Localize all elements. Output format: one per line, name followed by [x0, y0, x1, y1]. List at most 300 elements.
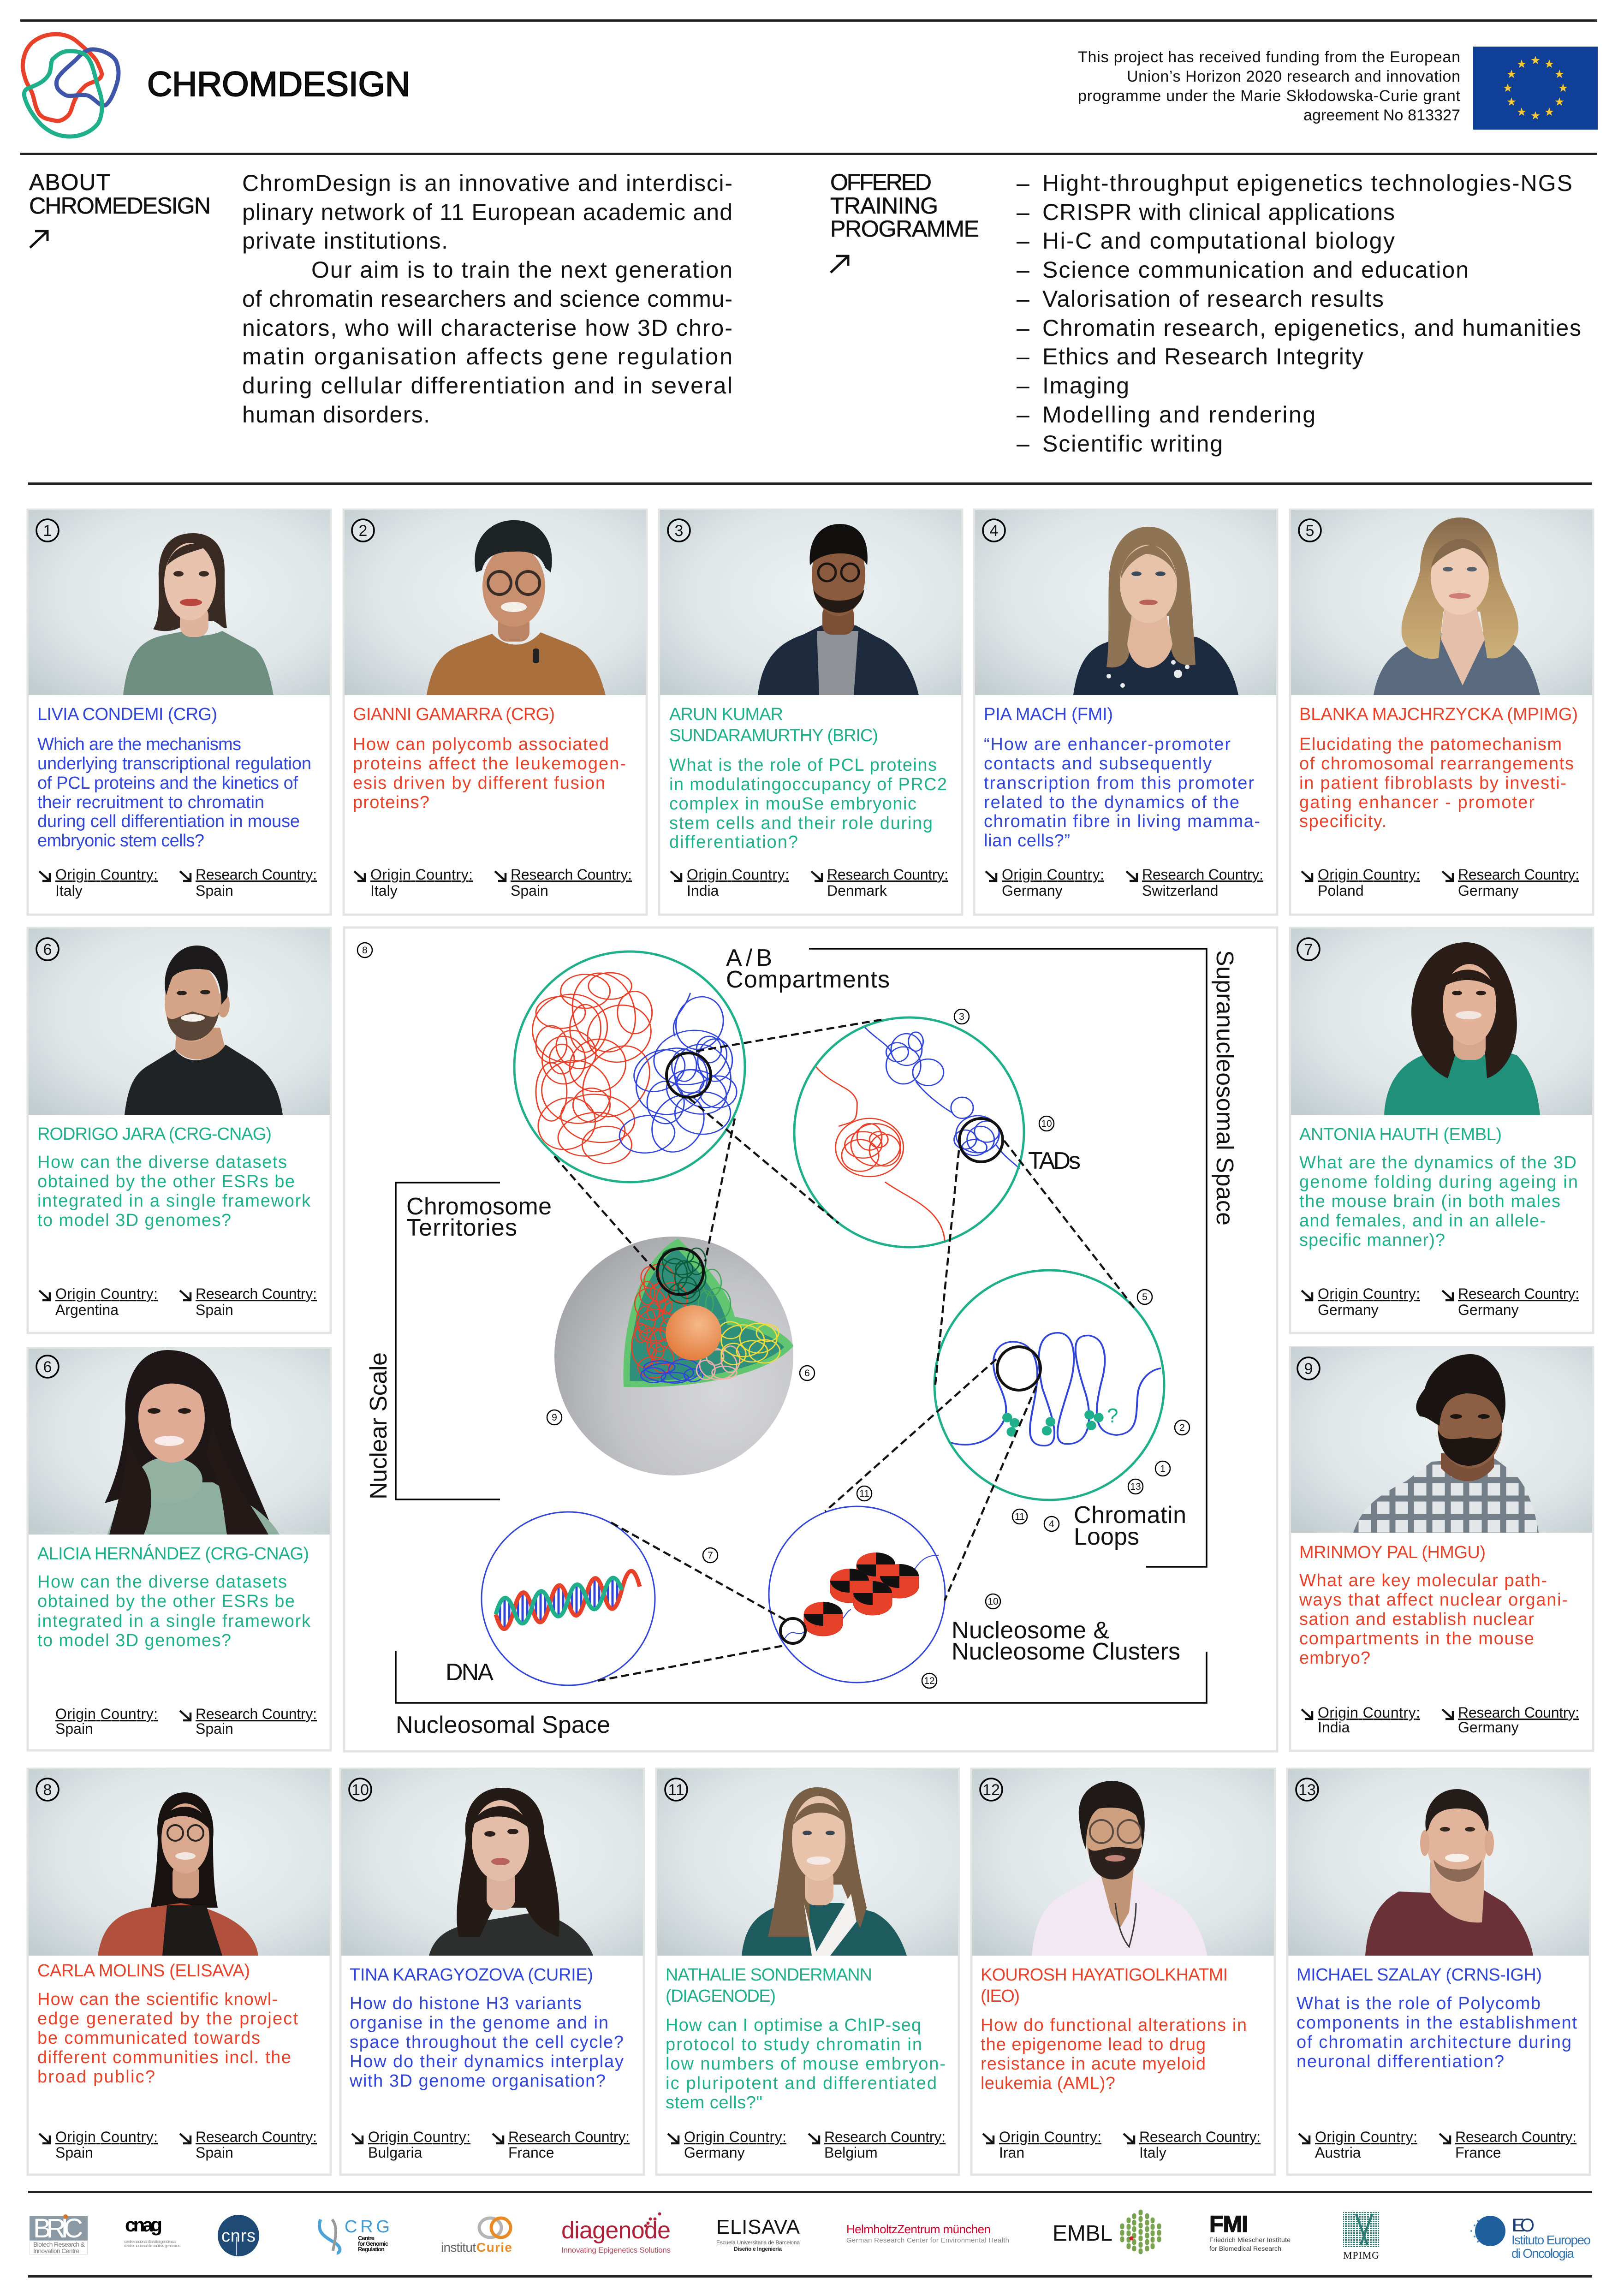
name and question: be communicated towards — [37, 2028, 260, 2048]
name and question: space throughout the cell cycle? — [350, 2033, 624, 2052]
diagram labels: Chromatin — [1074, 1502, 1186, 1529]
name and question: components in the establishment — [1297, 2013, 1577, 2033]
countries: Research Country: — [1142, 866, 1263, 883]
name and question — [37, 1961, 298, 2087]
training list: – — [1017, 257, 1029, 283]
name and question: contacts and subsequently — [984, 754, 1212, 773]
logo: BRIC: Biotech Research & — [33, 2241, 85, 2248]
name and question: “How are enhancer-promoter — [984, 735, 1231, 754]
logo: FMI — [1209, 2211, 1291, 2252]
name and question: obtained by the other ESRs be — [37, 1592, 295, 1611]
logo: CRG: CRG — [345, 2217, 390, 2237]
photo: Antonia — [1291, 928, 1592, 1115]
logo: CRG: Regulation — [358, 2246, 385, 2253]
name and question: How do functional alterations in — [981, 2016, 1247, 2035]
name and question: ways that affect nuclear organi- — [1299, 1590, 1568, 1610]
countries: Austria — [1315, 2144, 1361, 2161]
countries: Origin Country: — [684, 2129, 786, 2145]
researcher number markers: 10 — [1041, 1118, 1052, 1129]
name and question: MRINMOY PAL (HMGU) — [1299, 1543, 1486, 1562]
countries — [671, 866, 948, 899]
name and question — [669, 705, 947, 852]
name and question: MICHAEL SZALAY (CRNS-IGH) — [1297, 1965, 1542, 1985]
heading: offered training programme: TRAINING — [830, 193, 938, 219]
name and question: RODRIGO JARA (CRG-CNAG) — [37, 1124, 272, 1144]
name and question: Elucidating the patomechanism — [1299, 735, 1562, 754]
name and question — [1299, 1125, 1578, 1250]
name and question: in patient fibroblasts by investi- — [1299, 773, 1566, 793]
countries: Spain — [511, 882, 548, 899]
name and question: GIANNI GAMARRA (CRG) — [353, 705, 555, 724]
name and question: complex in mouSe embryonic — [669, 794, 916, 814]
logo: IEO: IEO — [1511, 2215, 1535, 2236]
name and question: How can polycomb associated — [353, 735, 609, 754]
countries — [39, 2129, 317, 2161]
number badge — [36, 1779, 59, 1801]
name and question: SUNDARAMURTHY (BRIC) — [669, 726, 878, 745]
countries: Origin Country: — [368, 2129, 470, 2145]
countries: Research Country: — [196, 1706, 317, 1722]
countries: Research Country: — [196, 2129, 317, 2145]
countries: Origin Country: — [999, 2129, 1101, 2145]
name and question: neuronal differentiation? — [1297, 2052, 1504, 2071]
countries: Research Country: — [196, 1285, 317, 1302]
training list: – — [1017, 315, 1029, 341]
card 2: Gianni Gamarra — [344, 510, 647, 915]
name and question: ARUN KUMAR — [669, 705, 783, 724]
countries — [983, 2129, 1261, 2161]
about text: plinary network of 11 European academic and — [242, 199, 732, 225]
countries: Research Country: — [827, 866, 948, 883]
number badge — [1296, 1779, 1318, 1801]
about text: of chromatin researchers and science commu- — [242, 286, 732, 312]
about text: ChromDesign is an innovative and interdisci- — [242, 170, 732, 196]
heading: about: ABOUT — [29, 169, 110, 195]
countries: Research Country: — [1458, 1285, 1579, 1302]
countries: Spain — [196, 2144, 233, 2161]
researcher number markers: 9 — [552, 1412, 557, 1423]
name and question: CARLA MOLINS (ELISAVA) — [37, 1961, 250, 1981]
countries: France — [1455, 2144, 1501, 2161]
diagram labels: Loops — [1074, 1523, 1139, 1550]
card 10: Tina Karagyozova — [340, 1769, 644, 2175]
researcher number markers: 13 — [1130, 1481, 1141, 1492]
logo: CNRS: cnrs — [221, 2226, 256, 2246]
name and question: (IEO) — [981, 1987, 1020, 2006]
heading: offered training programme: OFFERED — [830, 169, 932, 195]
countries — [668, 2129, 946, 2161]
countries: Germany — [1458, 1719, 1519, 1736]
countries — [39, 1285, 317, 1318]
logo: Helmholtz: HelmholtzZentrum münchen — [846, 2222, 991, 2236]
logo: Helmholtz — [846, 2222, 1009, 2244]
zoom rings — [657, 1053, 1041, 1643]
logo: BRIC: BRIC — [33, 2213, 83, 2243]
name and question: What is the role of Polycomb — [1297, 1994, 1541, 2013]
logo: IEO: di Oncologia — [1511, 2246, 1574, 2260]
name and question: compartments in the mouse — [1299, 1629, 1534, 1648]
countries: Origin Country: — [1318, 866, 1420, 883]
training list: CRISPR with clinical applications — [1042, 199, 1395, 225]
training list: – — [1017, 431, 1029, 457]
name and question — [981, 1965, 1247, 2093]
training list: – — [1017, 199, 1029, 225]
name and question: stem cells?" — [666, 2093, 762, 2112]
countries — [1302, 866, 1579, 899]
photo: Alicia — [29, 1349, 330, 1535]
researcher number markers: 4 — [1049, 1519, 1054, 1529]
photo: Blanka — [1291, 510, 1592, 695]
countries — [1302, 1285, 1579, 1318]
number badge: 6 — [43, 941, 52, 958]
name and question: to model 3D genomes? — [37, 1631, 231, 1650]
countries — [1299, 2129, 1576, 2161]
name and question: embryo? — [1299, 1648, 1370, 1668]
name and question: BLANKA MAJCHRZYCKA (MPIMG) — [1299, 705, 1578, 724]
name and question: underlying transcriptional regulation — [37, 754, 311, 773]
training list: Ethics and Research Integrity — [1042, 344, 1363, 369]
logo: BRIC: Innovation Centre — [33, 2247, 79, 2254]
countries: Spain — [196, 1720, 233, 1737]
researcher number markers: 10 — [987, 1596, 999, 1607]
photo: Rodrigo — [29, 928, 330, 1115]
logo: Institut Curie — [441, 2218, 512, 2254]
name and question: KOUROSH HAYATIGOLKHATMI — [981, 1965, 1228, 1985]
countries: India — [1318, 1719, 1350, 1736]
photo: Livia — [29, 510, 330, 695]
circle: chromatin loops: ? — [1107, 1404, 1118, 1427]
card 11: Nathalie Sondermann — [656, 1769, 959, 2175]
logo: Elisava — [716, 2216, 800, 2252]
name and question: TINA KARAGYOZOVA (CURIE) — [350, 1965, 593, 1985]
name and question: How do their dynamics interplay — [350, 2052, 624, 2071]
name and question: organise in the genome and in — [350, 2013, 608, 2033]
number badge — [668, 519, 690, 541]
researcher number markers: 11 — [1015, 1511, 1025, 1522]
photo: Pia — [975, 510, 1276, 695]
circle: chromatin loops — [934, 1270, 1164, 1500]
name and question: during cell differentiation in mouse — [37, 812, 300, 831]
name and question: How can the diverse datasets — [37, 1153, 287, 1172]
logo: CRG: for Genomic — [358, 2240, 388, 2247]
logo: FMI: FMI — [1209, 2211, 1248, 2237]
name and question: of PCL proteins and the kinetics of — [37, 773, 298, 793]
countries: France — [508, 2144, 554, 2161]
name and question — [37, 705, 311, 851]
diagram labels — [365, 945, 1238, 1738]
logo: cnag — [124, 2214, 180, 2248]
countries: Italy — [370, 882, 398, 899]
countries: Spain — [55, 2144, 93, 2161]
number badge: 4 — [990, 522, 998, 540]
logo: EMBL: EMBL — [1053, 2221, 1112, 2246]
name and question: specific manner)? — [1299, 1231, 1445, 1250]
countries: Iran — [999, 2144, 1024, 2161]
name and question: (DIAGENODE) — [666, 1987, 776, 2006]
training list: Scientific writing — [1042, 431, 1223, 457]
heading: about — [29, 169, 211, 219]
number badge: 8 — [43, 1781, 52, 1799]
name and question — [37, 1124, 311, 1230]
name and question: esis driven by different fusion — [353, 773, 605, 793]
logo: Diagenode — [561, 2212, 671, 2254]
training list — [1017, 170, 1581, 457]
name and question — [353, 705, 626, 812]
countries: Research Country: — [1458, 1704, 1579, 1721]
countries: Poland — [1318, 882, 1364, 899]
logo: CRG — [319, 2217, 390, 2253]
card 6b: Alicia Hernandez — [28, 1348, 331, 1750]
icon: arrow about — [30, 231, 48, 248]
countries: Origin Country: — [1318, 1704, 1420, 1721]
diagram labels: Nucleosome & — [952, 1617, 1109, 1644]
card 8: Carla Molins — [28, 1769, 331, 2175]
logo: Elisava: Escuela Universitaria de Barcelona — [716, 2239, 800, 2246]
number badge: 11 — [668, 1781, 684, 1799]
funding statement: Union’s Horizon 2020 research and innovation — [1127, 68, 1460, 85]
countries: Research Country: — [508, 2129, 630, 2145]
logo: MPIMG: MPIMG — [1343, 2249, 1379, 2261]
countries: Spain — [55, 1720, 93, 1737]
name and question: low numbers of mouse embryon- — [666, 2054, 946, 2074]
diagram labels: DNA — [446, 1659, 494, 1686]
training list: Hight-throughput epigenetics technologies-NGS — [1042, 170, 1572, 196]
photo: Michael — [1288, 1769, 1589, 1956]
training list: Science communication and education — [1042, 257, 1469, 283]
countries: Origin Country: — [370, 866, 473, 883]
countries: Germany — [1318, 1302, 1379, 1318]
number badge — [980, 1779, 1002, 1801]
name and question: leukemia (AML)? — [981, 2074, 1115, 2093]
name and question: broad public? — [37, 2067, 155, 2087]
countries — [39, 866, 317, 899]
number badge — [1297, 1357, 1320, 1380]
name and question: How do histone H3 variants — [350, 1994, 582, 2013]
card 13: Michael Szalay — [1287, 1769, 1590, 2175]
countries: Italy — [55, 882, 83, 899]
number badge: 6 — [43, 1358, 52, 1376]
researcher number markers: 12 — [924, 1676, 935, 1686]
number badge: 9 — [1304, 1360, 1313, 1378]
countries: Origin Country: — [55, 2129, 158, 2145]
logo: IEO: Istituto Europeo — [1511, 2233, 1591, 2247]
name and question: gating enhancer - promoter — [1299, 793, 1535, 812]
number badge: 10 — [351, 1781, 369, 1799]
training list: Modelling and rendering — [1042, 402, 1315, 428]
logo: EMBL — [1053, 2212, 1159, 2256]
name and question: LIVIA CONDEMI (CRG) — [37, 705, 217, 724]
training list: – — [1017, 402, 1029, 428]
about text: Our aim is to train the next generation — [311, 257, 732, 283]
name and question: NATHALIE SONDERMANN — [666, 1965, 872, 1985]
number badge: 2 — [359, 522, 367, 540]
logo: CNRS — [218, 2215, 259, 2256]
number badge: 12 — [982, 1781, 1000, 1799]
name and question: different communities incl. the — [37, 2048, 291, 2067]
logo: cnag: centro nacional de análisis genómico — [124, 2243, 180, 2248]
logo: FMI: Friedrich Miescher Institute — [1209, 2236, 1291, 2243]
photo: Carla — [29, 1769, 330, 1956]
logo: Elisava: ELISAVA — [716, 2216, 800, 2238]
countries: Research Country: — [1455, 2129, 1576, 2145]
training list: Valorisation of research results — [1042, 286, 1384, 312]
diagram labels: Nucleosome Clusters — [952, 1638, 1180, 1665]
name and question: What are the dynamics of the 3D — [1299, 1153, 1576, 1172]
diagram labels: Nucleosomal Space — [396, 1712, 610, 1738]
researcher number markers — [357, 943, 1190, 1688]
logo: ChromDesign interlaced rings — [23, 34, 119, 137]
circle: nucleosomes — [769, 1506, 945, 1683]
diagram labels: Compartments — [726, 966, 890, 993]
researcher number markers: 5 — [1142, 1292, 1148, 1303]
training list: – — [1017, 373, 1029, 399]
number badge: 13 — [1298, 1781, 1316, 1799]
countries: Germany — [684, 2144, 745, 2161]
name and question — [1299, 1543, 1568, 1668]
countries: Argentina — [55, 1302, 119, 1318]
countries: Germany — [1002, 882, 1063, 899]
countries: Belgium — [824, 2144, 878, 2161]
name and question: Which are the mechanisms — [37, 735, 241, 754]
training list: – — [1017, 170, 1029, 196]
number badge — [36, 938, 59, 960]
logo: BRIC — [30, 2213, 88, 2254]
logo: CRG: Centre — [358, 2235, 375, 2242]
name and question: embryonic stem cells? — [37, 831, 204, 851]
countries: Research Country: — [1139, 2129, 1261, 2145]
name and question — [1297, 1965, 1577, 2071]
logo: Diagenode: diagenode — [561, 2217, 671, 2244]
name and question: proteins affect the leukemogen- — [353, 754, 626, 773]
researcher number markers: 8 — [362, 945, 368, 956]
name and question: obtained by the other ESRs be — [37, 1172, 295, 1191]
countries: Research Country: — [511, 866, 632, 883]
photo: Tina — [341, 1769, 643, 1956]
number badge — [349, 1779, 371, 1801]
countries — [55, 1706, 317, 1737]
logo: Institut Curie: institut — [441, 2240, 476, 2254]
researcher number markers: 2 — [1179, 1422, 1185, 1433]
panel: 3D genome scales diagram — [344, 928, 1277, 1751]
heading: offered training programme — [830, 169, 979, 242]
countries: Origin Country: — [55, 1706, 158, 1722]
about text: matin organisation affects gene regulation — [242, 344, 732, 369]
countries: Origin Country: — [687, 866, 789, 883]
icon: arrow training — [831, 256, 848, 273]
name and question: of chromosomal rearrangements — [1299, 754, 1574, 773]
name and question: in modulatingoccupancy of PRC2 — [669, 775, 947, 794]
logo: IEO — [1470, 2215, 1591, 2260]
countries: Research Country: — [1458, 866, 1579, 883]
researcher number markers: 6 — [804, 1368, 810, 1379]
photo: Nathalie — [657, 1769, 958, 1956]
logo: Institut Curie: Curie — [476, 2240, 512, 2254]
name and question: How can the scientific knowl- — [37, 1990, 278, 2009]
training list: – — [1017, 286, 1029, 312]
icon: EU flag — [1473, 47, 1598, 130]
card 4: Pia Mach — [974, 510, 1277, 915]
about text: private institutions. — [242, 228, 448, 254]
card 1: Livia Condemi — [28, 510, 331, 915]
number badge — [1299, 519, 1321, 541]
number badge — [983, 519, 1005, 541]
about text: nicators, who will characterise how 3D chro- — [242, 315, 732, 341]
about text: during cellular differentiation and in several — [242, 373, 732, 399]
photo: Mrinmoy — [1291, 1347, 1592, 1533]
name and question: and females, and in an allele- — [1299, 1211, 1546, 1231]
circle: TADs — [794, 1017, 1024, 1247]
photo: Arun — [660, 510, 961, 695]
name and question: with 3D genome organisation? — [349, 2071, 606, 2091]
photo: Gianni — [345, 510, 646, 695]
name and question — [666, 1965, 946, 2112]
name and question: to model 3D genomes? — [37, 1211, 231, 1230]
countries: Spain — [196, 882, 233, 899]
name and question — [37, 1544, 311, 1650]
name and question — [349, 1965, 624, 2091]
name and question: lian cells?” — [984, 831, 1070, 851]
name and question: What are key molecular path- — [1299, 1571, 1547, 1590]
funding statement: programme under the Marie Skłodowska-Curie grant — [1078, 87, 1461, 105]
researcher number markers: 7 — [708, 1550, 713, 1561]
name and question: differentiation? — [669, 833, 798, 852]
logo: Diagenode: Innovating Epigenetics Solutions — [561, 2246, 671, 2254]
training list: Chromatin research, epigenetics, and humanities — [1042, 315, 1581, 341]
countries — [986, 866, 1263, 899]
name and question: edge generated by the project — [37, 2009, 298, 2028]
name and question: protocol to study chromatin in — [666, 2035, 922, 2054]
logo: cnag: cnag — [125, 2214, 162, 2236]
name and question: of chromatin architecture during — [1297, 2033, 1571, 2052]
card 7: Antonia Hauth — [1290, 928, 1593, 1333]
researcher number markers: 3 — [959, 1011, 964, 1022]
name and question: chromatin fibre in living mamma- — [984, 812, 1260, 831]
card 9: Mrinmoy Pal — [1290, 1347, 1593, 1751]
countries: Italy — [1139, 2144, 1166, 2161]
countries: Origin Country: — [1318, 1285, 1420, 1302]
number badge: 1 — [43, 522, 52, 540]
name and question: PIA MACH (FMI) — [984, 705, 1113, 724]
name and question: stem cells and their role during — [669, 814, 933, 833]
name and question: proteins? — [353, 793, 429, 812]
name and question: ic pluripotent and differentiated — [666, 2074, 937, 2093]
countries: Switzerland — [1142, 882, 1218, 899]
number badge: 3 — [675, 522, 683, 540]
funding statement: This project has received funding from the European — [1078, 48, 1460, 66]
logo: FMI: for Biomedical Research — [1209, 2245, 1281, 2252]
diagram labels: TADs — [1028, 1148, 1081, 1174]
countries: Denmark — [827, 882, 887, 899]
card 5: Blanka Majchrzycka — [1290, 510, 1593, 915]
logo: MPIMG — [1343, 2212, 1379, 2261]
card 6: Rodrigo Jara — [28, 928, 331, 1333]
name and question: specificity. — [1299, 812, 1386, 831]
name and question: the mouse brain (in both males — [1299, 1192, 1560, 1211]
name and question: transcription from this promoter — [984, 773, 1254, 793]
circle: DNA helix — [482, 1512, 655, 1685]
countries: Origin Country: — [1315, 2129, 1417, 2145]
countries — [352, 2129, 630, 2161]
name and question: ALICIA HERNÁNDEZ (CRG-CNAG) — [37, 1544, 309, 1564]
photo: Kourosh — [972, 1769, 1274, 1956]
logo: cnag: centre nacional d'anàlisi genòmica — [124, 2239, 176, 2244]
number badge — [36, 1356, 59, 1378]
countries: Germany — [1458, 1302, 1519, 1318]
heading: offered training programme: PROGRAMME — [830, 216, 979, 242]
name and question: sation and establish nuclear — [1299, 1610, 1534, 1629]
name and question — [984, 705, 1260, 851]
number badge — [352, 519, 374, 541]
